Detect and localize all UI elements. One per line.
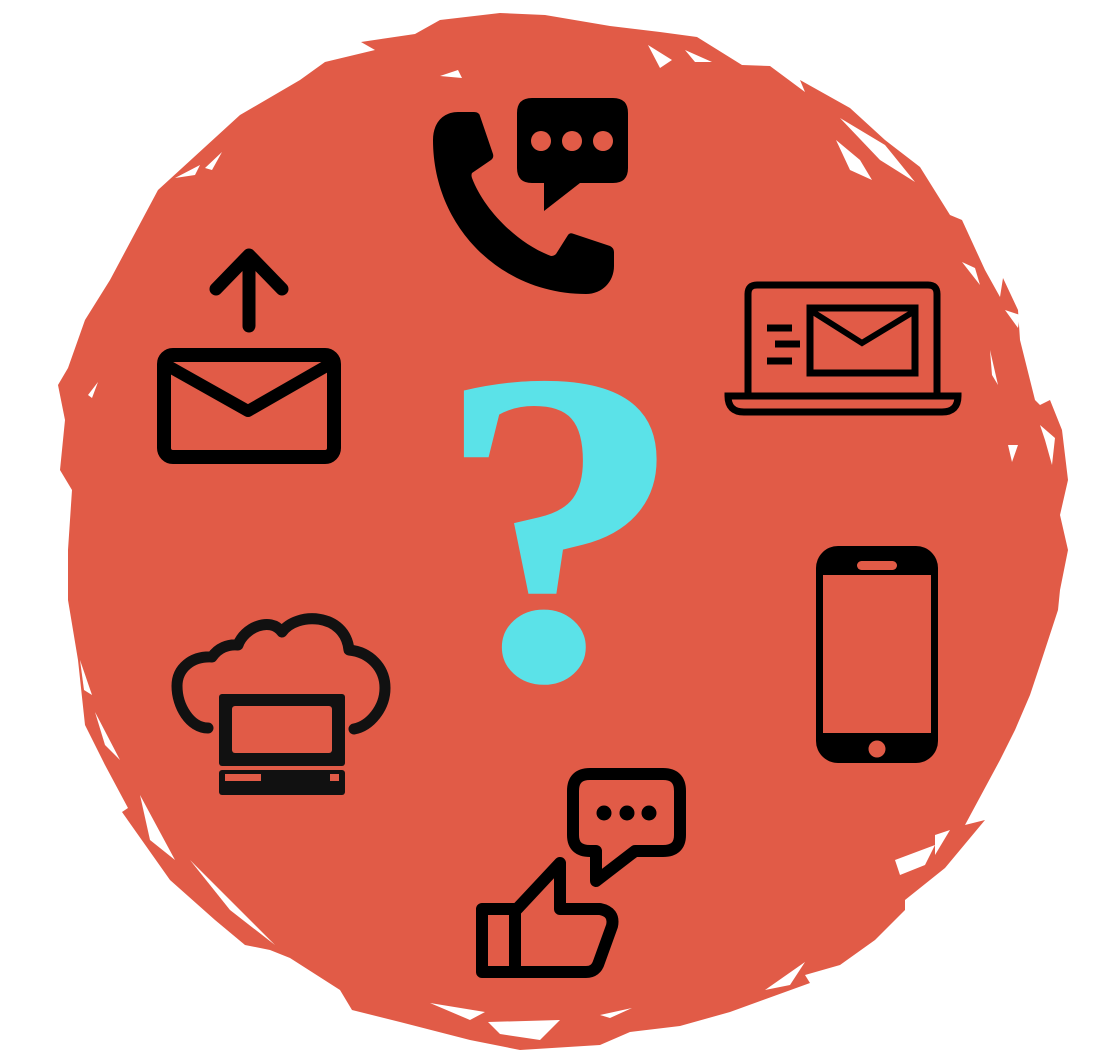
question mark: ?: [435, 281, 685, 774]
icon: cloud computer: [177, 619, 385, 795]
icon: smartphone: [816, 546, 938, 763]
icon: laptop with email: [728, 285, 958, 412]
icon: thumbs up with speech bubble: [482, 774, 680, 972]
icon: phone with speech bubble: [433, 98, 628, 294]
icon: email upload: [164, 255, 334, 457]
